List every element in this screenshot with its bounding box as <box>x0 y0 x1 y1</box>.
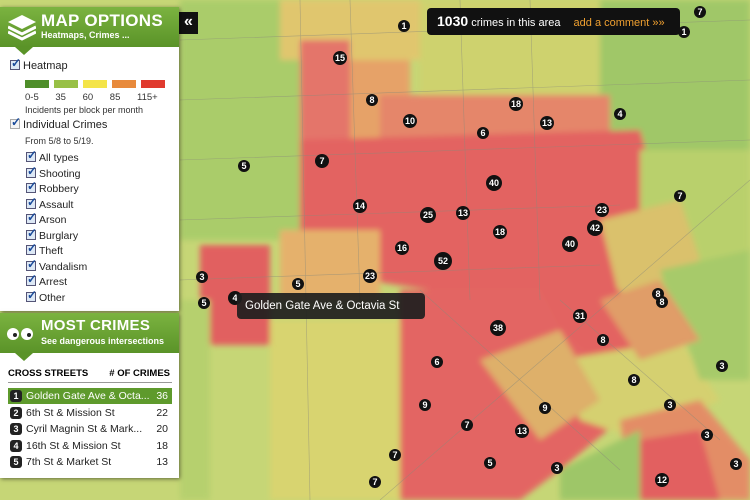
markers: 13 <box>458 208 468 218</box>
markers: 1 <box>401 21 407 31</box>
markers: 12 <box>657 475 667 485</box>
panel: most crimes <box>0 313 179 478</box>
markers: 7 <box>464 420 470 430</box>
markers: 8 <box>600 335 606 345</box>
crime types: From 5/8 to 5/19. <box>25 136 94 146</box>
markers: 13 <box>542 118 552 128</box>
markers: 4 <box>617 109 623 119</box>
crime types: Arson <box>39 214 66 226</box>
markers: 6 <box>480 128 486 138</box>
markers: 23 <box>597 205 607 215</box>
markers: 5 <box>201 298 207 308</box>
header: map options: MAP OPTIONS <box>41 11 163 30</box>
markers: 3 <box>199 272 205 282</box>
heatmap legend <box>10 59 165 115</box>
header: map options: Heatmaps, Crimes ... <box>41 30 130 40</box>
markers: 7 <box>319 156 325 166</box>
table: cross streets: 4 <box>13 441 18 451</box>
markers: 5 <box>295 279 301 289</box>
table: cross streets: 20 <box>156 423 168 435</box>
crime types: Other <box>39 292 65 304</box>
collapse button <box>179 12 198 34</box>
markers: 14 <box>355 201 365 211</box>
table: cross streets: 2 <box>13 408 18 418</box>
table: cross streets: 3 <box>13 424 18 434</box>
table: cross streets: 13 <box>156 456 168 468</box>
crime types: Vandalism <box>39 261 87 273</box>
heatmap legend: Incidents per block per month <box>25 105 143 115</box>
table: cross streets: Golden Gate Ave & Octa... <box>26 390 150 402</box>
table: cross streets: 18 <box>156 440 168 452</box>
markers: 13 <box>517 426 527 436</box>
markers: 9 <box>422 400 428 410</box>
table: cross streets: 36 <box>156 390 168 402</box>
top bar: crime count: 1030 crimes in this area add a comment »» <box>437 13 665 29</box>
markers: 3 <box>704 430 710 440</box>
table: cross streets: 22 <box>156 407 168 419</box>
crime types: Theft <box>39 245 63 257</box>
markers: 16 <box>397 243 407 253</box>
tooltip: intersection <box>237 293 425 319</box>
table: cross streets: Cyril Magnin St & Mark... <box>26 423 142 435</box>
header: most crimes <box>0 313 179 353</box>
markers: 5 <box>241 161 247 171</box>
table: cross streets <box>8 368 172 468</box>
markers: 31 <box>575 311 585 321</box>
markers: 8 <box>631 375 637 385</box>
header: most crimes: MOST CRIMES <box>41 317 150 334</box>
crime types <box>10 118 107 304</box>
markers: 42 <box>590 223 600 233</box>
markers: 5 <box>487 458 493 468</box>
markers: 8 <box>659 297 665 307</box>
table: cross streets: 6th St & Mission St <box>26 407 115 419</box>
table: cross streets: 16th St & Mission St <box>26 440 121 452</box>
markers: 40 <box>489 178 499 188</box>
markers: 1 <box>681 27 687 37</box>
crime types: Individual Crimes <box>23 119 107 131</box>
table: cross streets: CROSS STREETS <box>8 368 88 379</box>
markers: 6 <box>434 357 440 367</box>
markers: 7 <box>392 450 398 460</box>
markers: 9 <box>542 403 548 413</box>
crime types: Arrest <box>39 276 67 288</box>
markers: 7 <box>372 477 378 487</box>
crime types: Robbery <box>39 183 79 195</box>
panel: map options <box>0 7 179 311</box>
header: most crimes: See dangerous intersections <box>41 336 164 346</box>
tooltip: intersection: Golden Gate Ave & Octavia St <box>245 300 400 312</box>
markers: 3 <box>733 459 739 469</box>
markers: 40 <box>565 239 575 249</box>
crime types: Shooting <box>39 168 80 180</box>
collapse button: « <box>184 13 193 30</box>
table: cross streets: 1 <box>13 391 18 401</box>
top bar: crime count <box>427 8 680 35</box>
markers: 18 <box>495 227 505 237</box>
crime types: Burglary <box>39 230 78 242</box>
table: cross streets: 5 <box>13 457 18 467</box>
crime types: All types <box>39 152 79 164</box>
table: cross streets: # OF CRIMES <box>109 368 170 379</box>
markers: 7 <box>697 7 703 17</box>
markers: 10 <box>405 116 415 126</box>
markers: 38 <box>493 323 503 333</box>
markers: 18 <box>511 99 521 109</box>
heatmap legend: 0-5 35 60 85 115+ <box>25 92 158 103</box>
markers: 4 <box>232 293 238 303</box>
markers: 3 <box>667 400 673 410</box>
markers: 15 <box>335 53 345 63</box>
markers: 3 <box>719 361 725 371</box>
markers: 8 <box>655 289 661 299</box>
markers: 52 <box>438 256 448 266</box>
markers: 7 <box>677 191 683 201</box>
markers: 23 <box>365 271 375 281</box>
table: cross streets: 7th St & Market St <box>26 456 111 468</box>
heatmap legend: Heatmap <box>23 60 68 72</box>
markers: 8 <box>369 95 375 105</box>
markers: 3 <box>554 463 560 473</box>
header: map options <box>0 7 179 47</box>
crime types: Assault <box>39 199 73 211</box>
markers: 25 <box>423 210 433 220</box>
